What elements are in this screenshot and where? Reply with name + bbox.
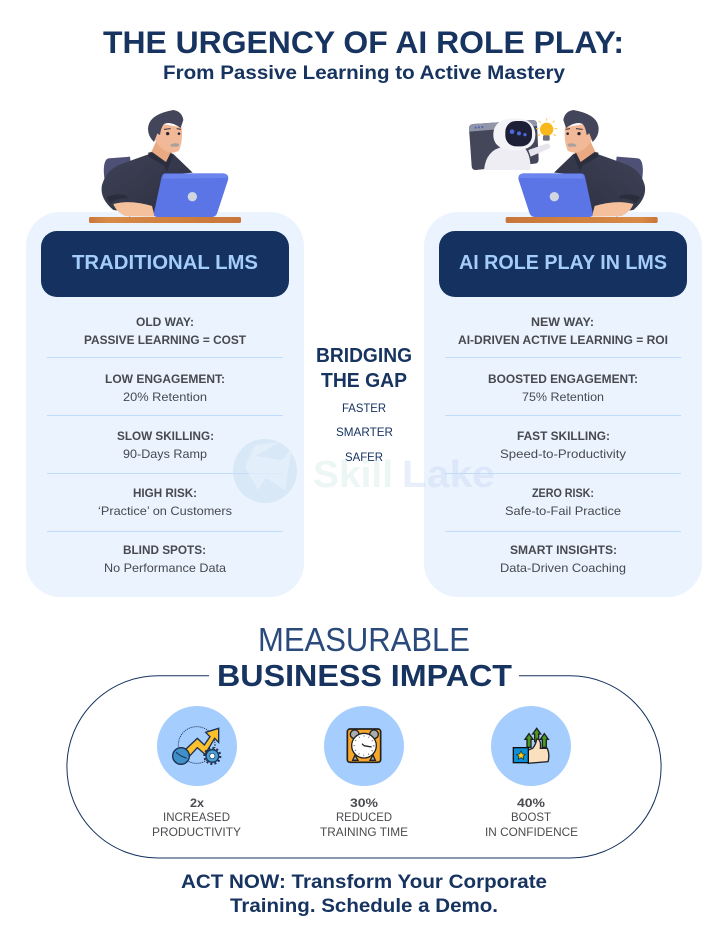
subtitle: From Passive Learning to Active Mastery: [163, 62, 565, 84]
row: smart insights: [500, 543, 626, 575]
row: slow skilling: SLOW SKILLING:: [117, 429, 214, 443]
header: traditional LMS: TRADITIONAL LMS: [72, 252, 258, 274]
panel: AI role play in LMS: [424, 212, 702, 597]
row: old way: PASSIVE LEARNING = COST: [84, 333, 247, 347]
list: faster smarter safer: FASTER: [342, 401, 386, 415]
label: reduced training time: [320, 810, 408, 839]
icon: chart, clock and gear: [173, 727, 220, 764]
row: boosted engagement: BOOSTED ENGAGEMENT:: [488, 372, 638, 386]
row: high risk: HIGH RISK:: [133, 486, 197, 500]
list: faster smarter safer: SAFER: [345, 450, 383, 464]
label: 30%: 30%: [350, 796, 378, 810]
heading: bridging the gap: THE GAP: [321, 369, 407, 392]
title: THE URGENCY OF AI ROLE PLAY:: [103, 24, 624, 60]
illustration: man at laptop (traditional): [89, 110, 241, 223]
row: zero risk: Safe-to-Fail Practice: [505, 504, 621, 518]
label: increased productivity: INCREASED: [163, 810, 230, 824]
heading: measurable business impact: BUSINESS IMPACT: [217, 658, 512, 693]
row: new way: NEW WAY:: [531, 315, 594, 329]
label: boost in confidence: BOOST: [511, 810, 552, 824]
label: reduced training time: REDUCED: [336, 810, 392, 824]
label: 40%: 40%: [517, 796, 545, 810]
label: boost in confidence: IN CONFIDENCE: [485, 825, 578, 839]
row: low engagement: [105, 372, 225, 404]
row: blind spots: [104, 543, 226, 575]
row: fast skilling: Speed-to-Productivity: [500, 447, 626, 461]
row: zero risk: [505, 486, 621, 518]
call to action: Training. Schedule a Demo.: [230, 895, 498, 917]
row: old way: OLD WAY:: [136, 315, 194, 329]
row: boosted engagement: [488, 372, 638, 404]
header: AI role play in LMS: [439, 231, 687, 297]
row: smart insights: SMART INSIGHTS:: [510, 543, 617, 557]
watermark: SkillLake logo: Lake: [402, 454, 495, 496]
list: faster smarter safer: SMARTER: [336, 425, 393, 439]
heading: measurable business impact: [217, 621, 512, 693]
label: 2x: 2x: [190, 796, 204, 810]
label: reduced training time: TRAINING TIME: [320, 825, 408, 839]
watermark: SkillLake logo: [233, 439, 495, 503]
row: smart insights: Data-Driven Coaching: [500, 561, 626, 575]
heading: bridging the gap: [316, 344, 412, 464]
row: zero risk: ZERO RISK:: [532, 486, 594, 500]
title: [103, 24, 624, 84]
label: increased productivity: PRODUCTIVITY: [152, 825, 241, 839]
row: low engagement: 20% Retention: [123, 390, 207, 404]
icon: alarm clock: [347, 729, 381, 762]
list: faster smarter safer: [336, 401, 393, 464]
header: AI role play in LMS: AI ROLE PLAY IN LMS: [459, 252, 667, 274]
panel: traditional LMS: [26, 212, 304, 597]
row: fast skilling: [500, 429, 626, 461]
row: slow skilling: [117, 429, 214, 461]
watermark: SkillLake logo: Skill: [313, 454, 393, 496]
heading: measurable business impact: MEASURABLE: [258, 621, 470, 658]
row: high risk: [98, 486, 232, 518]
row: old way: [84, 315, 247, 347]
illustration: man at laptop with AI robot: [469, 110, 658, 223]
row: fast skilling: FAST SKILLING:: [517, 429, 610, 443]
stat: 40% boost in confidence: [485, 706, 578, 839]
heading: bridging the gap: BRIDGING: [316, 344, 412, 367]
row: slow skilling: 90-Days Ramp: [123, 447, 207, 461]
row: blind spots: No Performance Data: [104, 561, 226, 575]
row: low engagement: LOW ENGAGEMENT:: [105, 372, 225, 386]
row: new way: [458, 315, 668, 347]
icon: robot with light bulb: [469, 118, 557, 170]
icon: thumbs up with arrows: [513, 728, 549, 763]
row: boosted engagement: 75% Retention: [522, 390, 604, 404]
stat: 30% reduced training time: [320, 706, 408, 839]
row: blind spots: BLIND SPOTS:: [123, 543, 206, 557]
row: high risk: ‘Practice’ on Customers: [98, 504, 232, 518]
header: traditional LMS: [41, 231, 289, 297]
panel: impact pill outline: [67, 676, 661, 858]
call to action: ACT NOW: Transform Your Corporate: [181, 871, 547, 893]
label: boost in confidence: [485, 810, 578, 839]
call to action: [181, 871, 547, 917]
stat: 2x increased productivity: [152, 706, 241, 839]
label: increased productivity: [152, 810, 241, 839]
row: new way: AI-DRIVEN ACTIVE LEARNING = ROI: [458, 333, 668, 347]
